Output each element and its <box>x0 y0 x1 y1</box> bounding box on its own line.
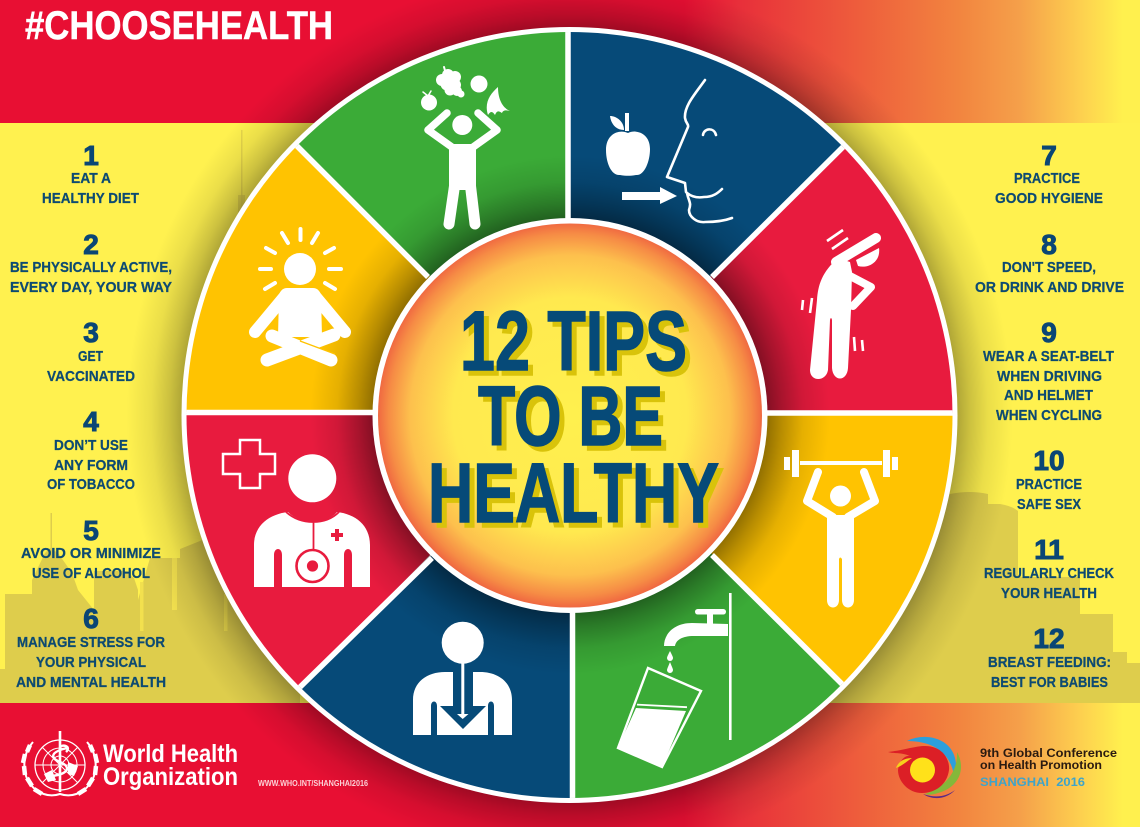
tip 6: 6 <box>83 603 99 634</box>
tip 6: MANAGE STRESS FOR <box>17 634 165 651</box>
tip 2: BE PHYSICALLY ACTIVE, <box>10 259 172 276</box>
tip 8: OR DRINK AND DRIVE <box>975 279 1124 296</box>
hub title: 12 TIPS <box>460 294 687 388</box>
tip 1 <box>42 140 139 207</box>
tip 4: DON’T USE <box>54 437 128 454</box>
header band <box>0 0 1140 123</box>
icon: tap and glass of water <box>618 593 732 767</box>
tip 3: GET <box>78 348 103 365</box>
segment: yellow weights <box>711 413 952 684</box>
segment: green diet <box>297 32 568 276</box>
hub title shadow: 12 TIPS <box>465 299 692 393</box>
tip 11: REGULARLY CHECK <box>984 565 1114 582</box>
logo text: conference: on Health Promotion <box>980 760 1102 772</box>
tips list: left column 1 to 6 <box>10 140 172 691</box>
tip 1: HEALTHY DIET <box>42 190 139 207</box>
tip 4: 4 <box>83 406 99 437</box>
hub title: HEALTHY <box>428 446 719 540</box>
icon: person stretching <box>802 230 879 379</box>
tip 3: VACCINATED <box>47 368 135 385</box>
tip 3: 3 <box>83 317 99 348</box>
segment: green water <box>572 553 842 798</box>
tip 7 <box>995 140 1103 207</box>
logo: World Health Organization emblem <box>23 731 97 795</box>
tip 6: AND MENTAL HEALTH <box>16 674 166 691</box>
tip 7: 7 <box>1041 140 1057 171</box>
tip 12: 12 <box>1033 623 1065 654</box>
icon: person with downward arrow <box>413 622 512 735</box>
footer band <box>0 703 1140 827</box>
hub title <box>428 294 719 540</box>
tip 9: WHEN CYCLING <box>996 407 1102 424</box>
icon: person lifting weights <box>784 450 898 608</box>
hub title shadow: TO BE <box>483 374 668 468</box>
hub: central circle <box>372 218 768 613</box>
tip 8: 8 <box>1041 229 1057 260</box>
tip 10 <box>1016 445 1082 513</box>
icon: meditating person <box>255 229 345 360</box>
tip 12 <box>988 623 1111 691</box>
tip 9: WHEN DRIVING <box>997 368 1102 385</box>
tip 8: DON'T SPEED, <box>1002 259 1096 276</box>
segment: red exercise <box>710 147 952 413</box>
tip 6: YOUR PHYSICAL <box>36 654 146 671</box>
wheel outer shadow <box>120 0 1020 827</box>
tip 10: 10 <box>1033 445 1065 476</box>
skyline: left city silhouette <box>0 130 300 705</box>
tip 11 <box>984 534 1114 602</box>
segment: yellow meditation <box>186 146 430 412</box>
icon: person eating fruit <box>421 67 510 224</box>
tip 9: WEAR A SEAT-BELT <box>983 348 1114 365</box>
tip 7: PRACTICE <box>1014 170 1080 187</box>
tips list: right column 7 to 12 <box>975 140 1124 691</box>
logo text: World Health Organization: World Health <box>103 740 238 768</box>
title: #CHOOSEHEALTH: #CHOOSEHEALTH <box>25 4 333 48</box>
hub title: TO BE <box>478 369 663 463</box>
tip 10: SAFE SEX <box>1017 496 1081 513</box>
icon: doctor with stethoscope <box>223 440 370 587</box>
tip 5: USE OF ALCOHOL <box>32 565 150 582</box>
segment: navy apple <box>570 32 843 276</box>
tip 6 <box>16 603 166 691</box>
skyline: right city silhouette <box>800 492 1140 705</box>
tip 12: BREAST FEEDING: <box>988 654 1111 671</box>
tip 2 <box>10 229 172 296</box>
tip 11: YOUR HEALTH <box>1001 585 1097 602</box>
hub drop shadow <box>319 168 821 662</box>
logo: conference swirl <box>888 737 961 798</box>
tip 10: PRACTICE <box>1016 476 1082 493</box>
background: yellow field <box>0 120 1140 705</box>
logo text: World Health Organization <box>103 740 238 791</box>
logo text: conference: SHANGHAI 2016 <box>980 777 1085 789</box>
wheel white rim <box>182 27 958 803</box>
logo text: conference: 9th Global Conference <box>980 748 1117 760</box>
tip 9: AND HELMET <box>1004 387 1093 404</box>
tip 9 <box>983 317 1114 424</box>
logo text: conference <box>980 748 1117 789</box>
hub title shadow: HEALTHY <box>433 451 724 545</box>
tip 2: 2 <box>83 229 99 260</box>
tip 4: ANY FORM <box>54 457 128 474</box>
tip 2: EVERY DAY, YOUR WAY <box>10 279 172 296</box>
tip 5: AVOID OR MINIMIZE <box>21 545 161 562</box>
tip 11: 11 <box>1034 534 1064 565</box>
tip 5 <box>21 515 161 582</box>
tip 4 <box>47 406 135 493</box>
tip 1: EAT A <box>71 170 111 187</box>
tip 3 <box>47 317 135 385</box>
url: WWW.WHO.INT/SHANGHAI2016 <box>258 779 368 788</box>
wheel <box>182 27 958 803</box>
tip 8 <box>975 229 1124 296</box>
tip 4: OF TOBACCO <box>47 476 135 493</box>
tip 12: BEST FOR BABIES <box>991 674 1108 691</box>
tip 5: 5 <box>83 515 99 546</box>
hub title shadow <box>433 299 724 545</box>
segment: red doctor <box>186 413 430 687</box>
tip 1: 1 <box>83 140 99 171</box>
logo text: World Health Organization: Organization <box>103 763 238 791</box>
segment: navy person <box>300 556 572 798</box>
icon: apple and face breathing in <box>606 80 732 222</box>
tip 7: GOOD HYGIENE <box>995 190 1103 207</box>
tip 9: 9 <box>1041 317 1057 348</box>
